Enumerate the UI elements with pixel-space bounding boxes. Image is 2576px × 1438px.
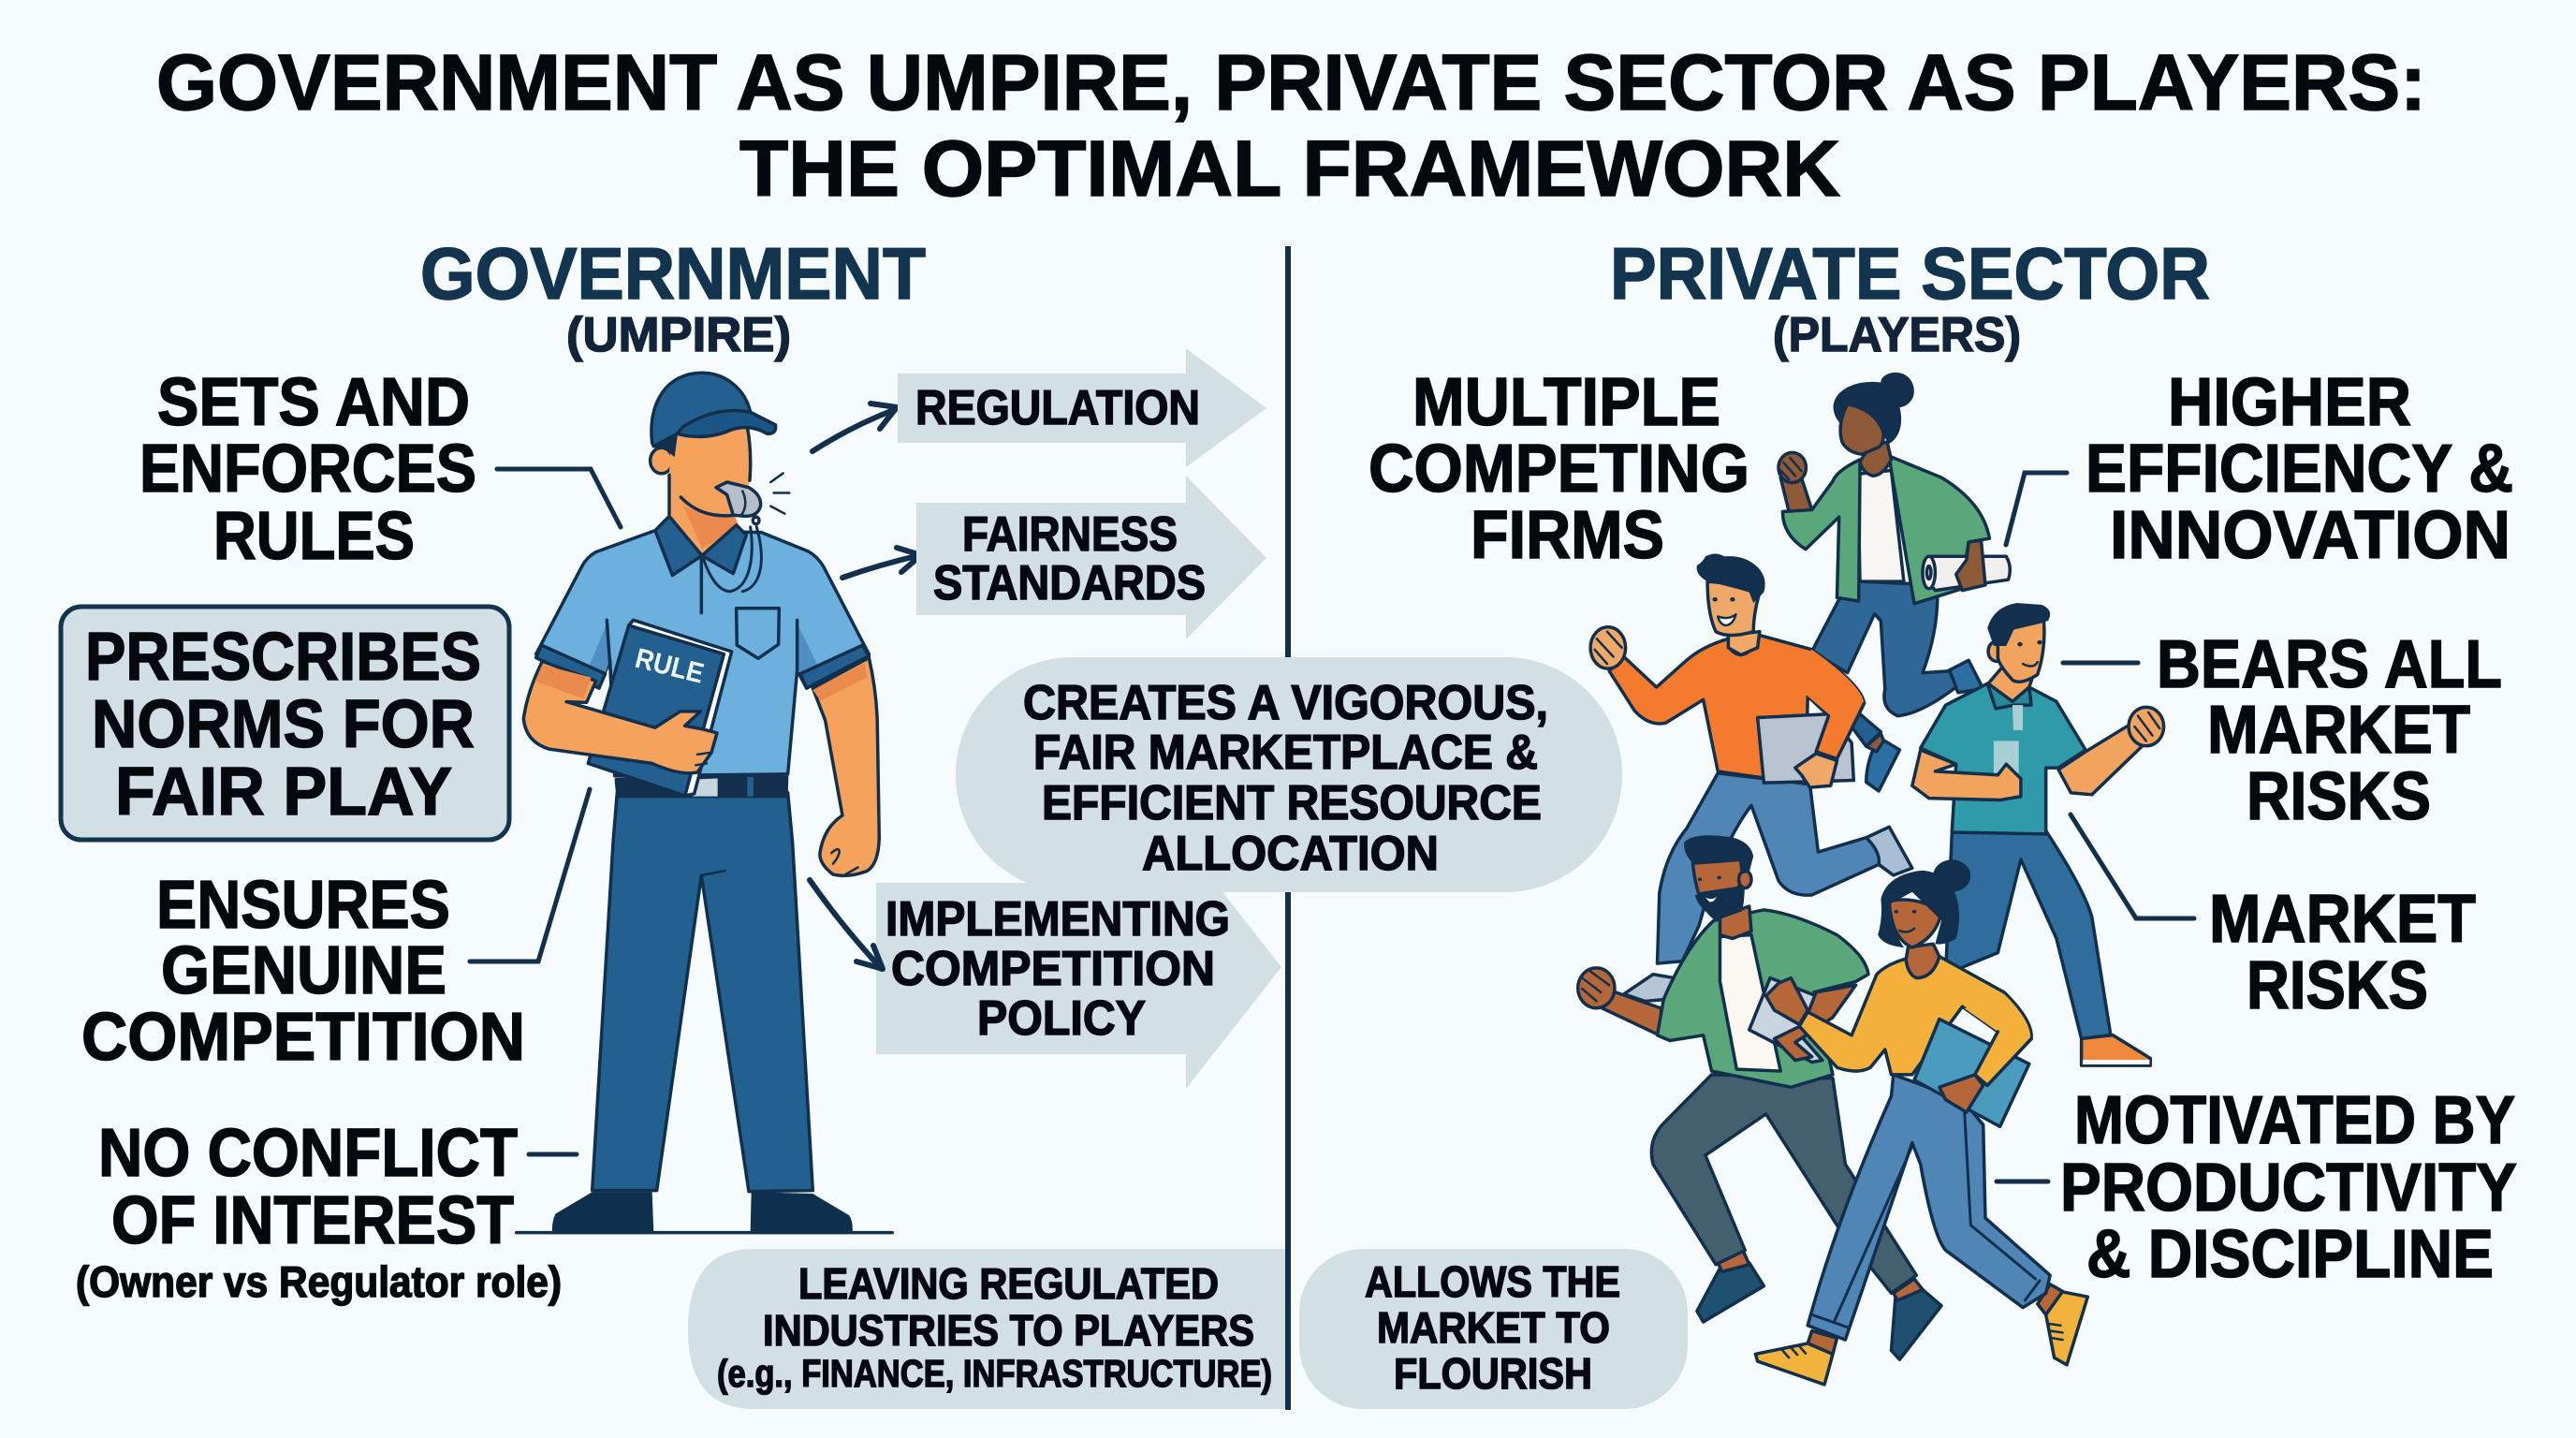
pill: allows the market to flourish: MARKET TO <box>1377 1303 1610 1352</box>
illustration: competing players <box>1578 374 2164 1385</box>
label: ensures genuine competition: ENSURES <box>156 868 450 943</box>
arrow: fairness standards <box>916 476 1266 639</box>
label: sets and enforces rules: SETS AND <box>157 365 470 440</box>
heading: government: (UMPIRE) <box>566 308 791 362</box>
label: no conflict of interest <box>76 1116 562 1306</box>
arrow: implementing competition policy: IMPLEMENTING <box>886 892 1230 946</box>
arrow: implementing competition policy <box>876 845 1281 1089</box>
pill: allows the market to flourish <box>1299 1249 1688 1409</box>
heading: private sector: PRIVATE SECTOR <box>1610 232 2210 315</box>
label: higher efficiency and innovation: HIGHER <box>2168 365 2411 440</box>
pill: creates a vigorous marketplace <box>956 657 1622 892</box>
heading: private sector <box>1610 232 2210 362</box>
pill: allows the market to flourish: FLOURISH <box>1394 1349 1592 1398</box>
pill: creates a vigorous marketplace: FAIR MARKETPLACE & <box>1033 726 1538 780</box>
label: sets and enforces rules <box>139 365 476 574</box>
pointer arrow to regulation <box>812 404 897 451</box>
pill: allows the market to flourish: ALLOWS THE <box>1365 1257 1620 1306</box>
label: market risks: MARKET <box>2209 882 2476 957</box>
label: motivated by productivity and discipline: PRODUCTIVITY <box>2060 1151 2517 1225</box>
heading: private sector: (PLAYERS) <box>1773 308 2021 362</box>
callout: prescribes norms for fair play: PRESCRIBES <box>85 620 481 695</box>
label: ensures genuine competition: GENUINE <box>161 933 446 1008</box>
label: higher efficiency and innovation <box>2086 365 2513 573</box>
pill: leaving regulated industries to players: LEAVING REGULATED <box>798 1259 1219 1308</box>
leader: sets and enforces rules <box>497 469 621 527</box>
pill: creates a vigorous marketplace: EFFICIENT RESOURCE <box>1042 776 1542 830</box>
label: sets and enforces rules: RULES <box>213 499 415 574</box>
player: bearded man in green shirt <box>1578 835 1941 1359</box>
arrow: regulation: REGULATION <box>915 381 1200 435</box>
label: no conflict of interest: (Owner vs Regulator role) <box>76 1257 562 1306</box>
umpire legs and shoes <box>517 793 892 1233</box>
label: ensures genuine competition: COMPETITION <box>81 1000 525 1075</box>
leader: motivated by productivity <box>1997 1180 2048 1183</box>
label: no conflict of interest: NO CONFLICT <box>98 1116 518 1191</box>
heading: government <box>420 232 926 362</box>
arrow: fairness standards: STANDARDS <box>933 556 1206 610</box>
label: bears all market risks: RISKS <box>2247 759 2431 834</box>
leader: bears all market risks <box>2063 661 2138 665</box>
label: multiple competing firms: MULTIPLE <box>1412 365 1720 440</box>
label: motivated by productivity and discipline <box>2060 1083 2517 1292</box>
leader: market risks <box>2071 814 2194 918</box>
arrow: regulation <box>898 348 1266 467</box>
pill: creates a vigorous marketplace: ALLOCATION <box>1142 827 1439 881</box>
callout: prescribes norms for fair play: NORMS FOR <box>92 687 475 762</box>
label: bears all market risks: MARKET <box>2207 693 2470 768</box>
leader: no conflict of interest <box>529 1152 577 1157</box>
label: market risks: RISKS <box>2247 948 2428 1023</box>
pointer arrow to fairness standards <box>842 548 921 578</box>
label: bears all market risks <box>2157 627 2502 834</box>
arrow: implementing competition policy: POLICY <box>977 991 1146 1046</box>
label: multiple competing firms: COMPETING <box>1368 432 1749 506</box>
label: multiple competing firms <box>1368 365 1749 573</box>
player: man in teal polo <box>1912 603 2164 1065</box>
leader: higher efficiency <box>2006 473 2067 545</box>
title: GOVERNMENT AS UMPIRE, PRIVATE SECTOR AS PLAYERS: <box>156 38 2426 126</box>
label: sets and enforces rules: ENFORCES <box>139 432 476 506</box>
arrow: implementing competition policy: COMPETITION <box>891 942 1215 996</box>
title <box>156 38 2426 213</box>
pointer arrow to competition policy <box>810 880 883 969</box>
label: motivated by productivity and discipline: & DISCIPLINE <box>2086 1217 2494 1292</box>
illustration: umpire <box>517 373 892 1233</box>
player: woman in green jacket with scroll <box>1778 374 2010 791</box>
player: woman in yellow sweater <box>1755 859 2087 1385</box>
label: no conflict of interest: OF INTEREST <box>111 1183 514 1258</box>
pill: leaving regulated industries to players: (e.g., FINANCE, INFRASTRUCTURE) <box>717 1352 1272 1395</box>
label: higher efficiency and innovation: EFFICIENCY & <box>2086 432 2513 506</box>
title: THE OPTIMAL FRAMEWORK <box>739 125 1840 213</box>
label: motivated by productivity and discipline: MOTIVATED BY <box>2074 1083 2515 1158</box>
label: bears all market risks: BEARS ALL <box>2157 627 2502 702</box>
umpire upper body <box>523 373 879 876</box>
heading: government: GOVERNMENT <box>420 232 926 315</box>
pill: leaving regulated industries to players <box>688 1249 1285 1409</box>
rule book label: RULE <box>632 643 707 690</box>
player: man in orange sweater <box>1590 553 1912 963</box>
label: higher efficiency and innovation: INNOVATION <box>2110 498 2510 573</box>
center divider <box>1285 246 1291 1410</box>
label: ensures genuine competition <box>81 868 525 1075</box>
label: multiple competing firms: FIRMS <box>1471 498 1664 573</box>
pill: leaving regulated industries to players: INDUSTRIES TO PLAYERS <box>763 1306 1254 1355</box>
callout: prescribes norms for fair play <box>61 607 509 840</box>
arrow: fairness standards: FAIRNESS <box>962 507 1178 562</box>
label: market risks <box>2209 882 2476 1023</box>
leader: ensures genuine competition <box>470 789 590 961</box>
pill: creates a vigorous marketplace: CREATES A VIGOROUS, <box>1023 676 1548 730</box>
callout: prescribes norms for fair play: FAIR PLAY <box>115 755 452 829</box>
